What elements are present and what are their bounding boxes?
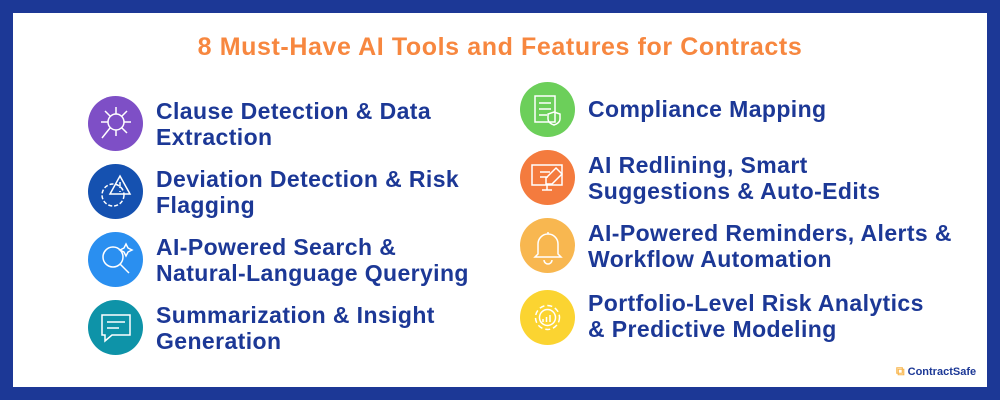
item: portfolio analytics: & Predictive Modeling (588, 316, 837, 342)
item: clause detection: Clause Detection & Data (156, 98, 431, 124)
item: clause detection: Extraction (156, 124, 272, 150)
icon: search sparkle (88, 232, 143, 287)
logo: ⧉ ContractSafe (896, 364, 976, 378)
item: reminders: Workflow Automation (588, 246, 832, 272)
item: AI search: Natural-Language Querying (156, 260, 469, 286)
item: AI search (88, 232, 469, 287)
icon: gear warning (88, 164, 143, 219)
item: AI redlining: AI Redlining, Smart (588, 152, 808, 178)
item: compliance mapping: Compliance Mapping (588, 96, 826, 122)
item: AI redlining: Suggestions & Auto-Edits (588, 178, 880, 204)
item: summarization: Summarization & Insight (156, 302, 435, 328)
icon: bell (520, 218, 575, 273)
item: summarization (88, 300, 435, 355)
item: deviation detection: Deviation Detection & Risk (156, 166, 459, 192)
icon: network magnifier (88, 96, 143, 151)
icon: monitor pen (520, 150, 575, 205)
item: reminders: AI-Powered Reminders, Alerts & (588, 220, 952, 246)
item: deviation detection: Flagging (156, 192, 255, 218)
item: compliance mapping (520, 82, 826, 137)
icon: checklist shield (520, 82, 575, 137)
item: summarization: Generation (156, 328, 281, 354)
item: deviation detection (88, 164, 459, 219)
item: AI search: AI-Powered Search & (156, 234, 396, 260)
item: portfolio analytics: Portfolio-Level Risk Analytics (588, 290, 924, 316)
icon: chat bubble (88, 300, 143, 355)
icon: gear chart (520, 290, 575, 345)
item: clause detection (88, 96, 431, 151)
item: portfolio analytics (520, 290, 924, 345)
item: AI redlining (520, 150, 880, 205)
title: 8 Must-Have AI Tools and Features for Contracts (198, 33, 802, 61)
item: reminders (520, 218, 952, 273)
